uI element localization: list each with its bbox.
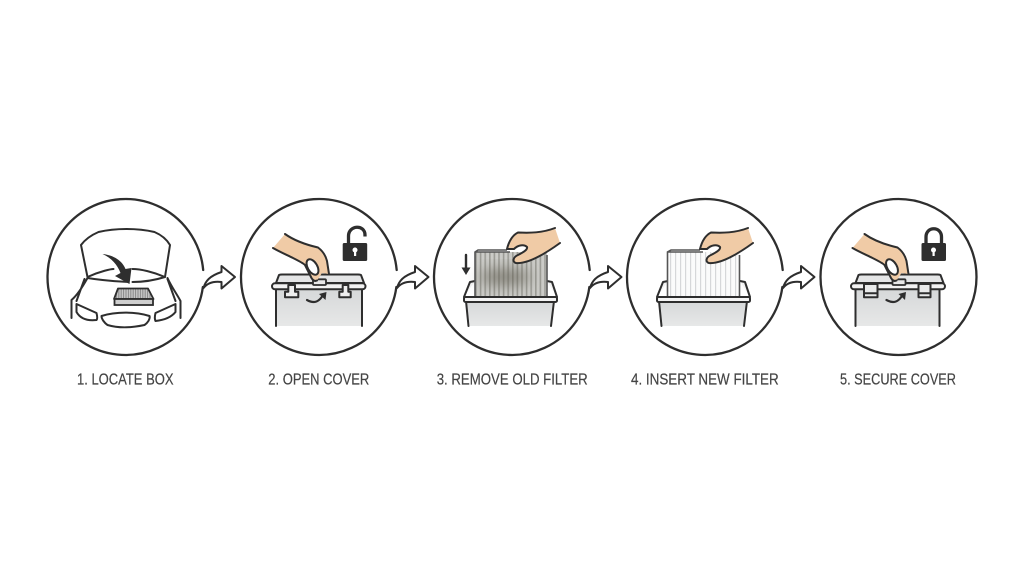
icon: hand — [273, 234, 329, 281]
icon: hand — [852, 234, 908, 281]
circle with gap — [48, 199, 203, 355]
icon: new filter — [668, 250, 740, 297]
step 4: insert new filter — [627, 199, 783, 355]
icon: hand — [700, 228, 753, 263]
icon: filter box — [114, 288, 154, 305]
circle — [820, 199, 976, 355]
icon: old dirty filter — [475, 250, 547, 297]
arrow 4 — [783, 266, 814, 288]
icon: box — [272, 274, 366, 326]
icon: car with raised hood — [72, 229, 180, 327]
circle with gap — [627, 199, 783, 355]
label 5: 5. SECURE COVER — [840, 372, 956, 388]
step 5: secure cover — [820, 199, 976, 355]
icon: box — [851, 274, 945, 326]
step 1: locate box — [48, 199, 203, 355]
arrow 2 — [397, 266, 428, 288]
icon: closed padlock — [922, 229, 946, 261]
step 3: remove old filter — [434, 199, 590, 355]
icon: tray back — [657, 281, 750, 297]
label 2: 2. OPEN COVER — [268, 372, 369, 388]
label 1: 1. LOCATE BOX — [77, 372, 174, 388]
icon: hand — [507, 228, 560, 263]
icon: tray back — [464, 281, 557, 297]
label 4: 4. INSERT NEW FILTER — [631, 372, 779, 388]
arrow 1 — [204, 266, 235, 288]
circle with gap — [434, 199, 590, 355]
icon: rotate arrow — [886, 292, 906, 302]
icon: tray — [657, 297, 750, 326]
circle with gap — [241, 199, 397, 355]
icon: curved arrow — [102, 254, 132, 284]
step 2: open cover — [241, 199, 397, 355]
icon: rotate arrow — [307, 292, 326, 302]
label 3: 3. REMOVE OLD FILTER — [437, 372, 588, 388]
icon: down arrow — [462, 255, 470, 275]
icon: open padlock — [343, 227, 367, 261]
arrow 3 — [590, 266, 622, 288]
icon: tray — [464, 297, 557, 326]
